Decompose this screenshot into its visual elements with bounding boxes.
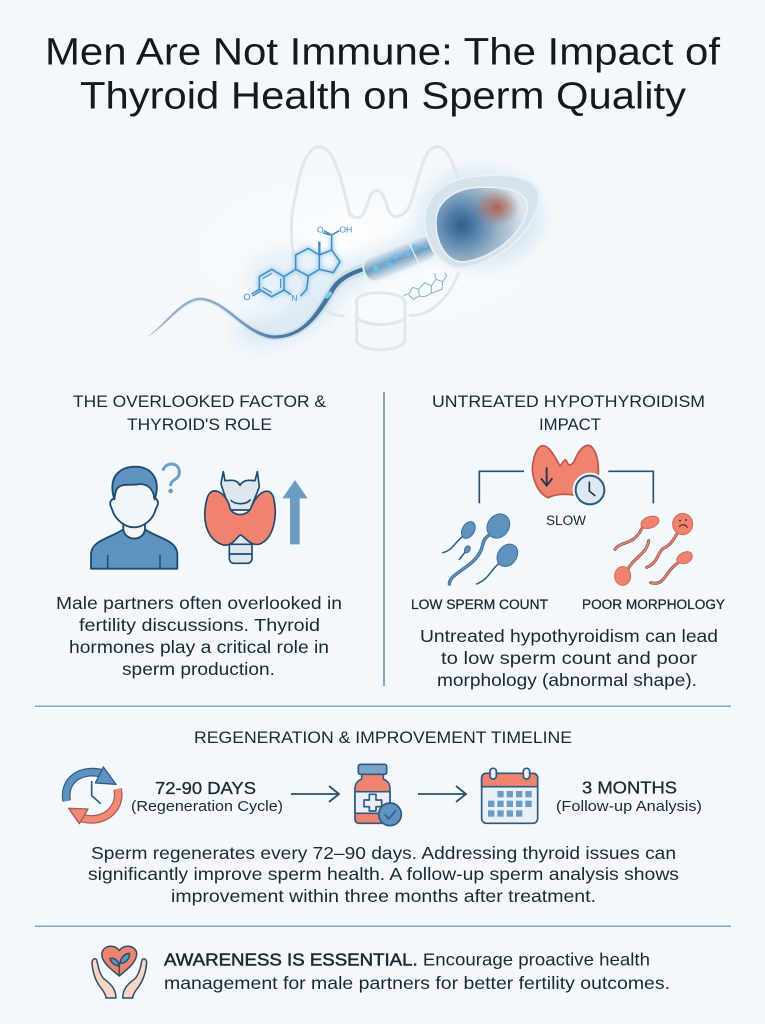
- label: 72-90 days: [131, 778, 283, 815]
- faint thyroid outline: [291, 147, 458, 350]
- soft blue glow: [240, 172, 540, 330]
- body text: significantly improve sperm health. A follow-up sperm analysis shows: [88, 864, 679, 884]
- body text: Male partners often overlooked in: [56, 593, 342, 613]
- hormone molecule: [243, 225, 352, 303]
- hero illustration: sperm cell, thyroid outline and hormone molecules: [147, 147, 540, 350]
- icon: thyroid gland: [205, 472, 275, 563]
- sperm tail: [147, 259, 376, 340]
- icon: cycle clock: [66, 767, 118, 824]
- body text: hormones play a critical role in: [69, 637, 329, 657]
- label: 72-90 days: (Regeneration Cycle): [131, 798, 283, 815]
- closing message: [164, 950, 670, 993]
- icon: up arrow: [282, 480, 308, 544]
- heading: UNTREATED HYPOTHYROIDISM: [432, 393, 705, 411]
- arrow: [291, 786, 339, 802]
- hormone molecule: N: [291, 293, 297, 303]
- icon: hands holding heart with sprout: [92, 946, 147, 998]
- panel: awareness: [92, 946, 670, 998]
- body text: Untreated hypothyroidism can lead: [420, 626, 718, 646]
- icon: poor morphology: [615, 513, 693, 585]
- icon: calendar: [482, 768, 538, 823]
- arrow: [418, 786, 466, 802]
- body text: fertility discussions. Thyroid: [79, 615, 320, 635]
- icon: low sperm count: [443, 510, 522, 584]
- closing message: AWARENESS IS ESSENTIAL. Encourage proactive health: [164, 950, 650, 970]
- body text: [56, 593, 342, 679]
- label: slow: SLOW: [546, 513, 586, 528]
- heading: IMPACT: [539, 416, 601, 434]
- icon: slow thyroid with clock and connectors: [479, 445, 653, 507]
- sperm head: [425, 175, 539, 268]
- panel: overlooked factor and thyroid's role: [56, 393, 342, 679]
- heading: THE OVERLOOKED FACTOR &: [73, 393, 326, 411]
- title: Men Are Not Immune: The Impact of: [45, 32, 720, 74]
- body text: to low sperm count and poor: [441, 648, 697, 668]
- body text: Sperm regenerates every 72–90 days. Addressing thyroid issues can: [91, 843, 676, 863]
- title: [45, 32, 720, 118]
- icon: man with question mark: [91, 464, 179, 569]
- title: Thyroid Health on Sperm Quality: [80, 76, 686, 118]
- sperm midpiece: [360, 233, 439, 284]
- heading: [432, 393, 705, 434]
- label: low sperm count: LOW SPERM COUNT: [411, 597, 548, 612]
- closing message: management for male partners for better fertility outcomes.: [164, 973, 670, 993]
- panel: untreated hypothyroidism impact: [411, 393, 725, 690]
- icon: medicine bottle: [355, 764, 401, 826]
- hormone molecule: OH: [339, 225, 352, 235]
- label: poor morphology: POOR MORPHOLOGY: [582, 597, 725, 612]
- label: 3 months: [556, 778, 702, 815]
- panel: regeneration and improvement timeline: [66, 729, 702, 906]
- body text: [420, 626, 718, 690]
- heading: [73, 393, 326, 434]
- heading: REGENERATION & IMPROVEMENT TIMELINE: [194, 729, 572, 747]
- heading: THYROID'S ROLE: [127, 416, 272, 434]
- body text: [88, 843, 679, 906]
- label: 72-90 days: 72-90 DAYS: [155, 778, 256, 798]
- label: 3 months: (Follow-up Analysis): [556, 798, 702, 815]
- body text: sperm production.: [122, 659, 275, 679]
- body text: morphology (abnormal shape).: [437, 670, 697, 690]
- small molecule: [403, 273, 447, 299]
- hormone molecule: O: [243, 292, 251, 302]
- label: 3 months: 3 MONTHS: [582, 778, 677, 798]
- body text: improvement within three months after treatment.: [171, 886, 596, 906]
- hormone molecule: O: [317, 225, 324, 235]
